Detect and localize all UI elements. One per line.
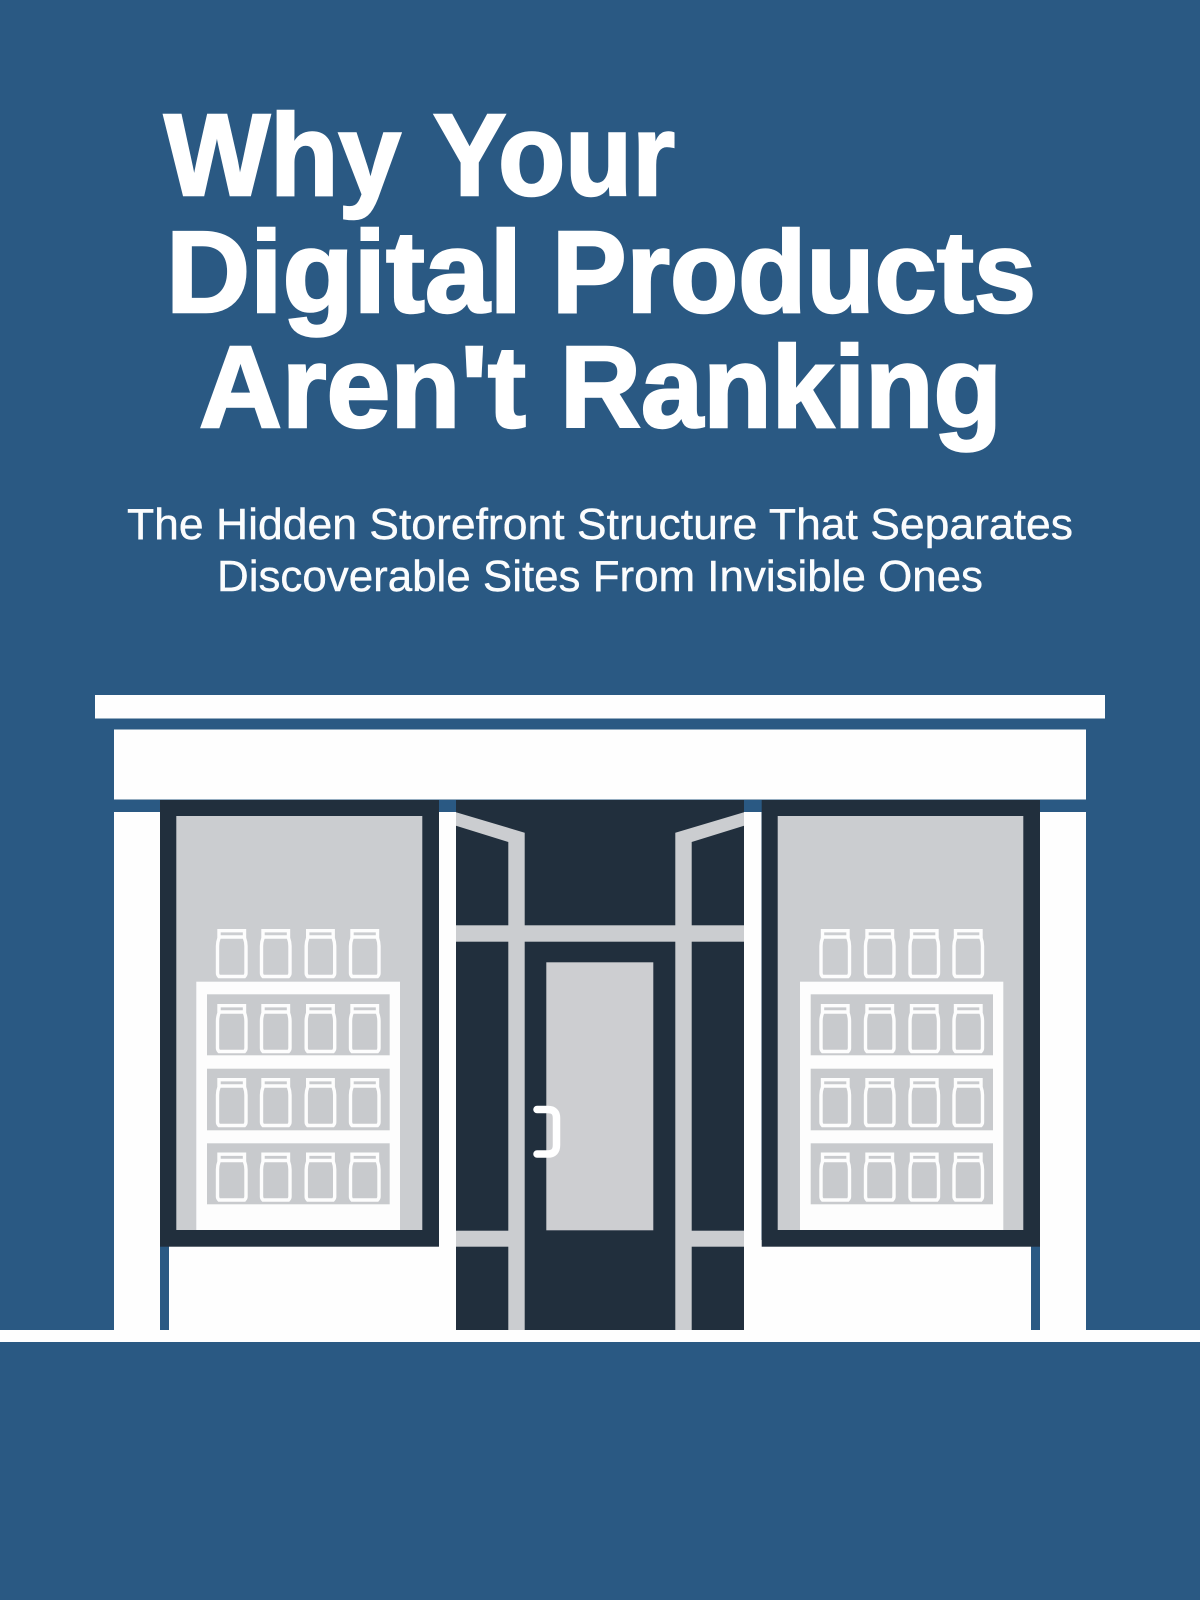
left wall base (169, 1240, 439, 1332)
title (164, 90, 1036, 452)
roof cap (95, 695, 1105, 718)
left door post (438, 812, 456, 1332)
display shelf (196, 982, 400, 1230)
entrance (456, 800, 744, 1330)
product jars (821, 931, 982, 1200)
subtitle: The Hidden Storefront Structure That Separates (127, 500, 1073, 549)
left pillar (114, 812, 160, 1332)
right wall base (761, 1240, 1031, 1332)
title: Why (164, 90, 401, 220)
right window (762, 800, 1040, 1247)
entrance dark recess (456, 800, 744, 1330)
lower left transom (456, 1231, 508, 1247)
subtitle: Discoverable Sites From Invisible Ones (217, 552, 983, 601)
product jars (218, 931, 379, 1200)
left window (160, 800, 439, 1247)
left frame bar with angled top (456, 812, 525, 1330)
window glass (176, 816, 422, 1230)
title: Digital (166, 207, 522, 337)
shelf compartments (207, 994, 390, 1204)
window glass (778, 816, 1023, 1230)
title: Ranking (560, 322, 1002, 452)
door handle (537, 1110, 556, 1154)
upper transom (456, 925, 744, 942)
display shelf (800, 982, 1003, 1230)
door glass (546, 962, 653, 1230)
window frame (160, 800, 439, 1247)
right pillar (1040, 812, 1086, 1332)
shelf compartments (811, 994, 993, 1204)
fascia sign band (114, 730, 1086, 800)
title: Aren't (199, 322, 526, 452)
ground line (0, 1330, 1200, 1342)
window frame (762, 800, 1040, 1247)
title: Products (552, 207, 1036, 337)
subtitle (127, 500, 1073, 601)
right frame bar with angled top (675, 812, 744, 1330)
right door post (744, 812, 762, 1332)
title: Your (433, 90, 675, 220)
storefront illustration (0, 695, 1200, 1342)
lower right transom (692, 1231, 744, 1247)
